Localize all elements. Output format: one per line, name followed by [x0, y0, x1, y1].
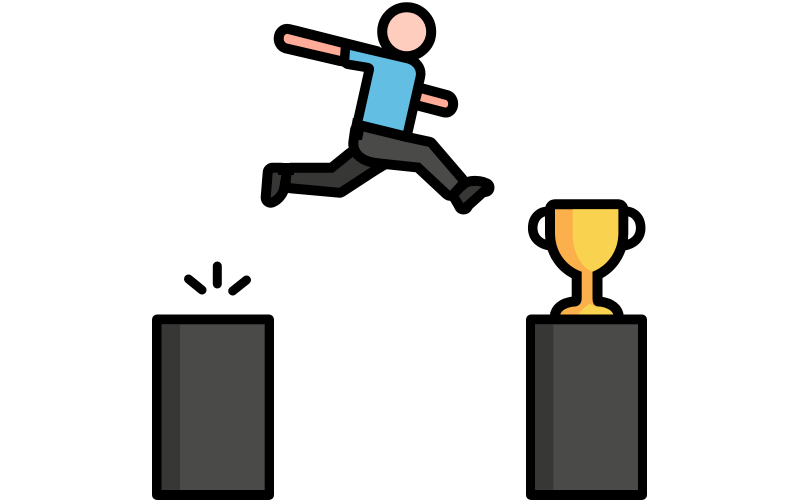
arm outline underlay	[295, 25, 380, 72]
shirt	[349, 50, 416, 131]
impact spark lines	[188, 266, 246, 291]
back shoe	[271, 173, 282, 198]
crotch outline filler	[340, 155, 388, 197]
jumping person	[271, 12, 494, 215]
trophy handles	[533, 211, 641, 246]
waist outline filler	[349, 118, 366, 140]
right pillar	[526, 314, 647, 500]
back ankle outline	[278, 163, 294, 175]
left pillar	[152, 314, 274, 500]
front shoe	[458, 186, 482, 203]
trophy base highlight	[578, 304, 614, 315]
front shoe outline tips	[454, 178, 494, 214]
trophy	[533, 209, 641, 315]
back leg	[291, 157, 373, 188]
front arm	[284, 34, 342, 56]
front leg	[358, 131, 458, 191]
head	[387, 12, 426, 51]
trophy cup and base	[555, 209, 618, 315]
trophy highlight	[573, 209, 618, 272]
back arm	[420, 94, 448, 108]
